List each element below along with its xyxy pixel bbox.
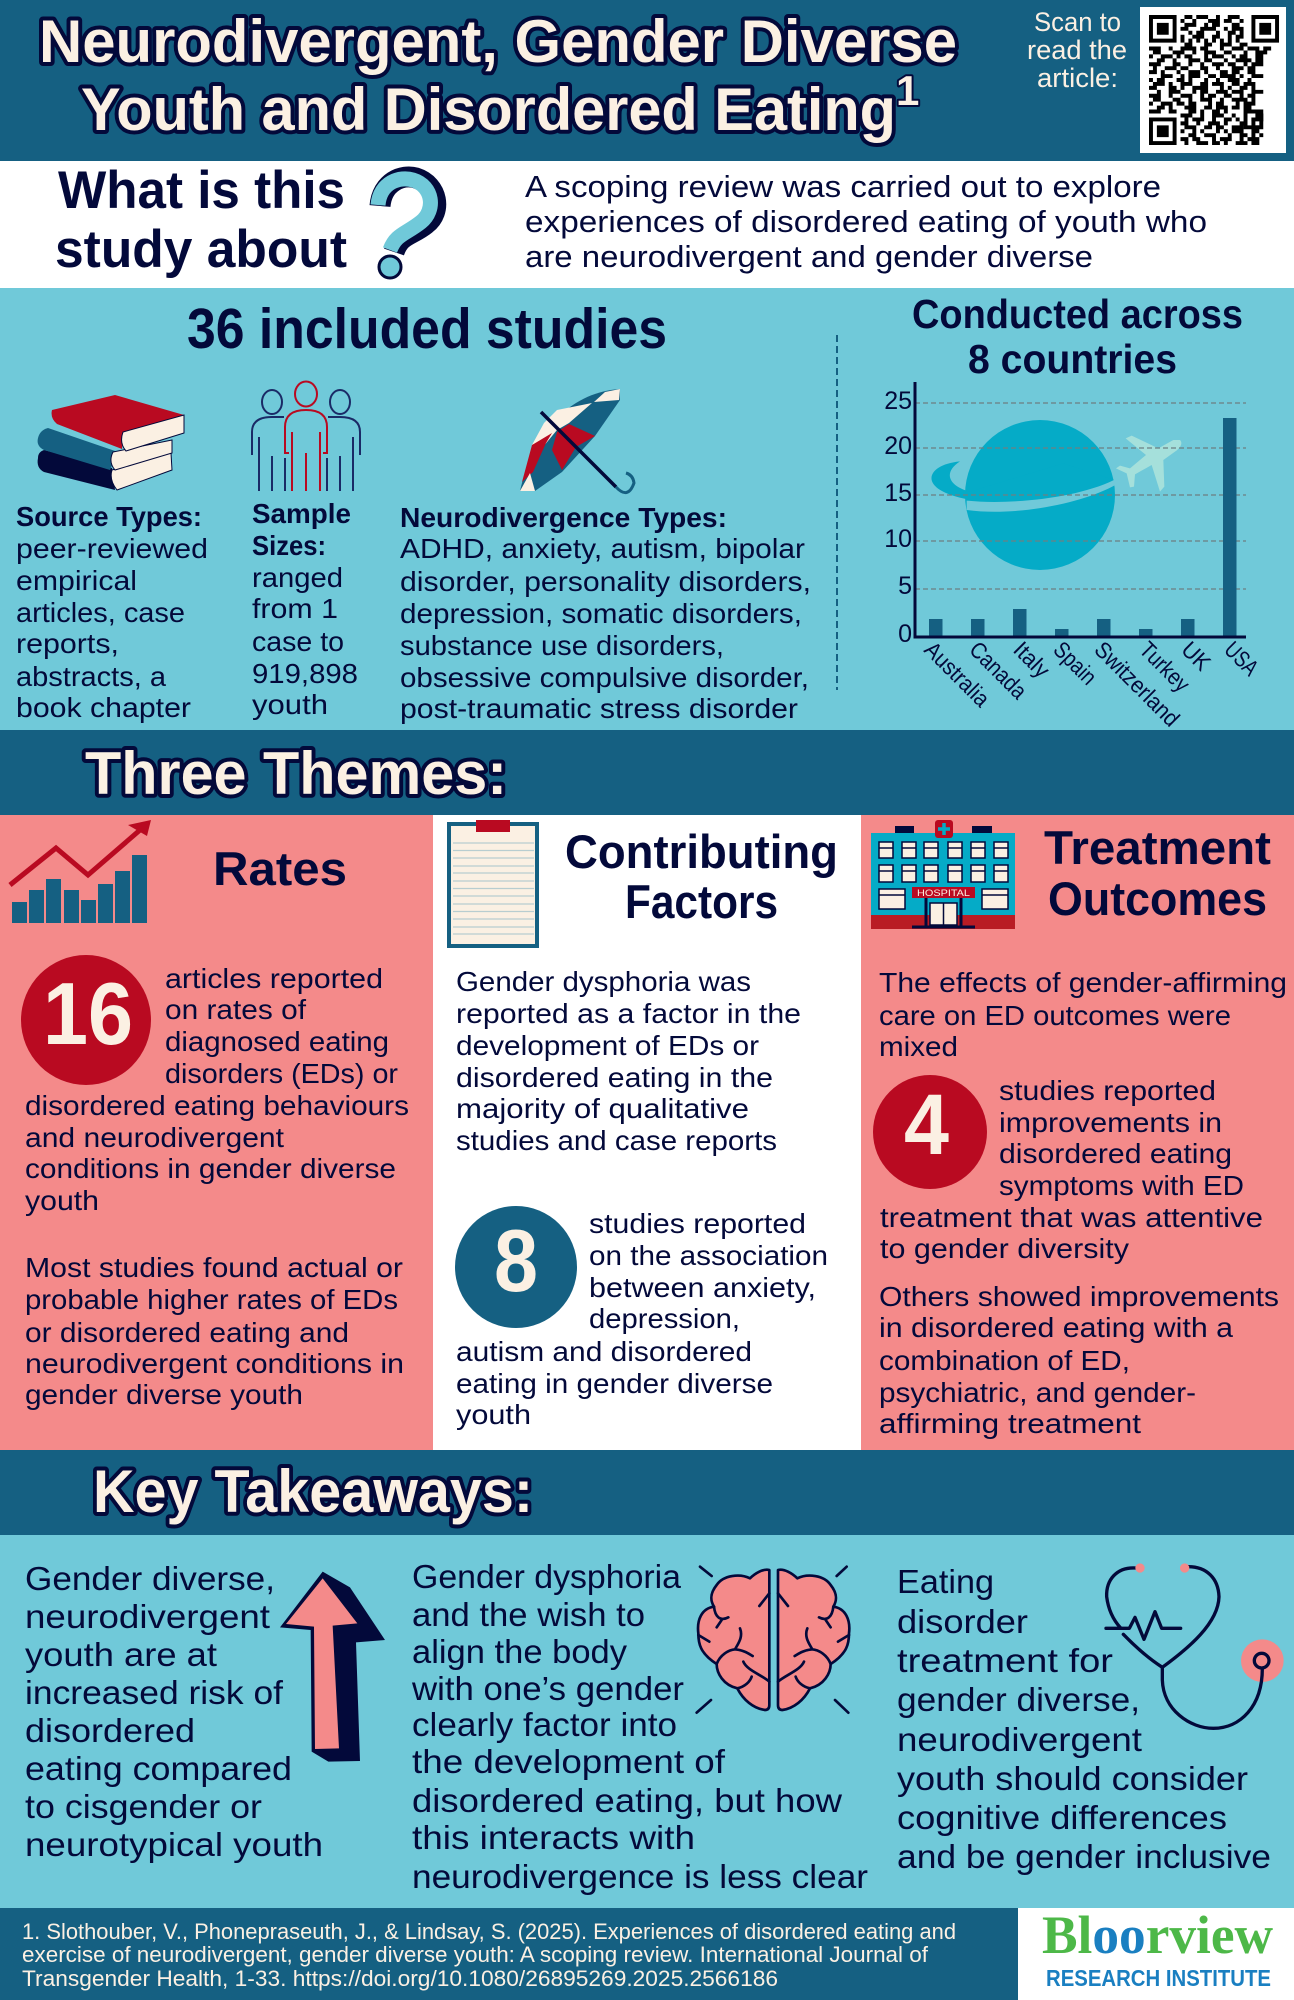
text: source types: articles, case	[16, 597, 185, 628]
text: higher rates finding: gender diverse youth	[25, 1379, 303, 1410]
text: gender dysphoria: disordered eating in the	[456, 1062, 773, 1093]
takeaway: gender dysphoria: with one’s gender	[411, 1670, 684, 1707]
icon: up arrow	[280, 1572, 385, 1762]
text: association studies	[456, 1208, 828, 1430]
footer: citation	[0, 1908, 1018, 2000]
heading: what is this study about: What is this	[58, 161, 345, 220]
text: higher rates finding: or disordered eating and	[25, 1317, 349, 1348]
text: association studies: on the association	[589, 1240, 828, 1271]
text: association studies: depression,	[589, 1303, 740, 1334]
text: combined treatment: combination of ED,	[879, 1345, 1130, 1376]
text: combined treatment	[879, 1281, 1279, 1439]
text: rates of eating disorders: and neurodivergent	[25, 1122, 284, 1153]
title: Neurodivergent, Gender Diverse	[39, 8, 957, 75]
text: mixed effects: mixed	[879, 1031, 958, 1062]
takeaway: increased risk: Gender diverse,	[25, 1560, 275, 1597]
heading band: key takeaways: Key Takeaways:	[93, 1458, 533, 1525]
bar chart: studies per country: Turkey	[1134, 636, 1196, 697]
bar chart: studies per country: Spain	[1048, 636, 1102, 690]
heading band: key takeaways	[0, 1450, 1294, 1535]
text: improvement studies: to gender diversity	[880, 1233, 1129, 1264]
QR code	[1140, 7, 1286, 153]
text: rates of eating disorders: disorders (EDs) or	[165, 1058, 398, 1089]
text: neurodivergence types	[400, 502, 811, 724]
text: association studies: studies reported	[589, 1208, 806, 1239]
stat circle: 8	[455, 1206, 577, 1328]
text: sample sizes: ranged	[252, 562, 343, 593]
text: combined treatment: affirming treatment	[879, 1408, 1141, 1439]
takeaway: increased risk: neurotypical youth	[25, 1826, 323, 1863]
text: neurodivergence types: depression, somatic disorders,	[400, 598, 802, 629]
takeaway: inclusive treatment: cognitive differences	[897, 1799, 1227, 1836]
stat circle: 4: 4	[904, 1077, 949, 1173]
text: rates of eating disorders: conditions in gender diverse	[25, 1153, 396, 1184]
icon: globe with plane	[931, 420, 1181, 570]
panel: what is this study about	[0, 161, 1294, 288]
heading: conducted across 8 countries: 8 countries	[968, 336, 1177, 382]
takeaway: inclusive treatment: gender diverse,	[897, 1681, 1140, 1718]
text: association studies: between anxiety,	[589, 1272, 816, 1303]
text: neurodivergence types: Neurodivergence Types:	[400, 502, 727, 533]
stat circle: 16: 16	[43, 964, 133, 1063]
takeaway: inclusive treatment: and be gender inclusive	[897, 1838, 1271, 1875]
bar chart: studies per country: 0	[898, 620, 912, 648]
text: source types: peer-reviewed	[16, 533, 208, 564]
icon: hospital: HOSPITAL	[917, 888, 970, 898]
text: rates of eating disorders: diagnosed eating	[165, 1026, 389, 1057]
icon: people	[252, 382, 360, 491]
study description	[525, 169, 1207, 274]
icon: hospital	[871, 820, 1015, 929]
takeaway: increased risk: eating compared	[25, 1750, 292, 1787]
text: rates of eating disorders: disordered eating behaviours	[25, 1090, 409, 1121]
text: neurodivergence types: disorder, personality disorders,	[400, 566, 811, 597]
takeaway: gender dysphoria	[411, 1558, 868, 1895]
stat circle: 8: 8	[494, 1211, 538, 1310]
heading: conducted across 8 countries: Conducted across	[912, 291, 1243, 337]
text: improvement studies: symptoms with ED	[999, 1170, 1244, 1201]
text: higher rates finding: probable higher rates of EDs	[25, 1284, 398, 1315]
takeaway: inclusive treatment: disorder	[897, 1603, 1028, 1640]
text: gender dysphoria: Gender dysphoria was	[456, 966, 751, 997]
panel: included studies	[0, 288, 1294, 732]
stat circle: 16	[21, 955, 151, 1085]
scan prompt: read the	[1027, 35, 1127, 65]
text: sample sizes: Sample	[252, 498, 351, 529]
takeaway: gender dysphoria: the development of	[412, 1743, 726, 1780]
takeaway: inclusive treatment	[897, 1563, 1271, 1875]
text: combined treatment: in disordered eating with a	[879, 1312, 1233, 1343]
footer: citation: 1. Slothouber, V., Phonepraseuth, J., & Lindsay, S. (2025). Experiences of disordered eating and	[22, 1919, 956, 1944]
takeaway: increased risk: to cisgender or	[25, 1788, 262, 1825]
text: gender dysphoria: development of EDs or	[456, 1030, 759, 1061]
heading band: three themes: Three Themes:	[85, 740, 507, 807]
text: mixed effects: The effects of gender-affirming	[879, 967, 1287, 998]
logo: Bloorview Research Institute: RESEARCH INSTITUTE	[1046, 1965, 1271, 1991]
heading: conducted across 8 countries	[912, 291, 1243, 382]
bar chart: studies per country: 20	[884, 432, 912, 460]
takeaway: inclusive treatment: treatment for	[897, 1642, 1113, 1679]
bar chart: studies per country: 25	[884, 387, 912, 415]
logo: Bloorview Research Institute	[1018, 1905, 1294, 2000]
text: gender dysphoria	[456, 966, 801, 1156]
text: sample sizes	[252, 498, 358, 720]
heading: treatment outcomes	[1044, 821, 1271, 925]
bar chart: studies per country: 5	[898, 572, 912, 600]
icon: question mark	[378, 177, 436, 278]
takeaway: inclusive treatment: Eating	[897, 1563, 994, 1600]
icon: umbrella	[520, 389, 634, 493]
icon: rising bar chart	[10, 820, 151, 923]
takeaway: increased risk	[25, 1560, 323, 1863]
text: rates of eating disorders: on rates of	[165, 994, 306, 1025]
footer: citation: Transgender Health, 1-33. https://doi.org/10.1080/26895269.2025.2566186	[22, 1966, 778, 1991]
text: mixed effects: care on ED outcomes were	[879, 1000, 1231, 1031]
text: sample sizes: from 1	[252, 593, 338, 624]
text: neurodivergence types: ADHD, anxiety, autism, bipolar	[400, 533, 805, 564]
bar chart: studies per country: USA	[1219, 636, 1264, 681]
bar chart: studies per country: Italy	[1008, 636, 1055, 683]
text: improvement studies: studies reported	[999, 1075, 1216, 1106]
heading: contributing factors	[565, 825, 838, 928]
text: gender dysphoria: majority of qualitative	[456, 1093, 749, 1124]
logo: Bloorview Research Institute: Bloorview	[1042, 1905, 1273, 1965]
text: source types: book chapter	[16, 692, 191, 723]
study description: are neurodivergent and gender diverse	[525, 239, 1093, 274]
text: source types: Source Types:	[16, 501, 202, 532]
scan prompt	[1027, 7, 1127, 93]
text: rates of eating disorders	[25, 963, 409, 1216]
takeaway: inclusive treatment: youth should consider	[897, 1760, 1248, 1797]
takeaway: gender dysphoria: and the wish to	[412, 1596, 645, 1633]
heading: contributing factors: Factors	[625, 875, 778, 928]
heading: 36 included studies: 36 included studies	[187, 297, 667, 361]
text: association studies: eating in gender diverse	[456, 1368, 773, 1399]
panel: key takeaways	[0, 1535, 1294, 1908]
bar chart: studies per country: Canada	[964, 636, 1032, 704]
bar chart: studies per country	[884, 382, 1264, 732]
text: improvement studies: improvements in	[999, 1107, 1222, 1138]
text: sample sizes: youth	[252, 689, 328, 720]
heading: treatment outcomes: Treatment	[1044, 821, 1271, 874]
text: gender dysphoria: studies and case reports	[456, 1125, 777, 1156]
text: combined treatment: Others showed improvements	[879, 1281, 1279, 1312]
takeaway: increased risk: youth are at	[25, 1636, 217, 1673]
text: higher rates finding: neurodivergent conditions in	[25, 1348, 404, 1379]
bar chart: studies per country: UK	[1176, 636, 1216, 676]
stat circle: 4	[873, 1075, 987, 1189]
scan prompt: Scan to	[1034, 7, 1121, 37]
takeaway: gender dysphoria: neurodivergence is less clear	[412, 1858, 868, 1895]
text: improvement studies: disordered eating	[999, 1138, 1232, 1169]
text: sample sizes: 919,898	[252, 658, 358, 689]
footer: citation: exercise of neurodivergent, gender diverse youth: A scoping review. International Journal of	[22, 1942, 929, 1967]
takeaway: gender dysphoria: this interacts with	[412, 1819, 695, 1856]
heading: what is this study about: study about	[55, 220, 347, 279]
text: neurodivergence types: post-traumatic stress disorder	[400, 693, 798, 724]
panel: rates	[0, 815, 433, 1450]
study description: A scoping review was carried out to explore	[525, 169, 1161, 204]
title	[39, 8, 957, 143]
text: combined treatment: psychiatric, and gender-	[879, 1377, 1196, 1408]
bar chart: studies per country: 10	[884, 525, 912, 553]
text: source types: reports,	[16, 628, 119, 659]
scan prompt: article:	[1037, 63, 1118, 93]
text: association studies: youth	[456, 1399, 531, 1430]
takeaway: inclusive treatment: neurodivergent	[897, 1721, 1142, 1758]
text: gender dysphoria: reported as a factor in the	[456, 998, 801, 1029]
title: 1	[896, 67, 919, 114]
text: higher rates finding: Most studies found actual or	[25, 1252, 403, 1283]
takeaway: gender dysphoria: Gender dysphoria	[412, 1558, 682, 1595]
text: rates of eating disorders: articles reported	[165, 963, 383, 994]
takeaway: gender dysphoria: align the body	[412, 1633, 628, 1670]
takeaway: increased risk: neurodivergent	[25, 1598, 270, 1635]
header band	[0, 0, 1294, 161]
text: source types: empirical	[16, 565, 137, 596]
study description: experiences of disordered eating of youth who	[525, 204, 1207, 239]
icon: books	[38, 395, 184, 490]
heading band: three themes	[0, 730, 1294, 815]
text: rates of eating disorders: youth	[25, 1185, 99, 1216]
takeaway: gender dysphoria: clearly factor into	[412, 1706, 677, 1743]
text: sample sizes: Sizes:	[252, 530, 326, 561]
bar chart: studies per country: 15	[884, 479, 912, 507]
text: association studies: autism and disordered	[456, 1336, 752, 1367]
text: higher rates finding	[25, 1252, 404, 1410]
takeaway: gender dysphoria: disordered eating, but how	[412, 1782, 842, 1819]
icon: clipboard	[449, 820, 537, 946]
icon: brain	[697, 1567, 849, 1713]
takeaway: increased risk: increased risk of	[25, 1674, 284, 1711]
text: neurodivergence types: obsessive compulsive disorder,	[400, 662, 809, 693]
takeaway: increased risk: disordered	[25, 1712, 195, 1749]
panel: contributing factors	[433, 815, 861, 1450]
text: sample sizes: case to	[252, 626, 344, 657]
bar chart: studies per country: Australia	[919, 636, 995, 712]
heading: treatment outcomes: Outcomes	[1048, 872, 1267, 925]
text: source types: abstracts, a	[16, 661, 166, 692]
panel: treatment outcomes	[861, 815, 1294, 1450]
text: improvement studies: treatment that was attentive	[880, 1202, 1263, 1233]
text: source types	[16, 501, 208, 723]
heading: what is this study about	[55, 161, 347, 279]
bar chart: studies per country: Switzerland	[1089, 636, 1185, 732]
heading: rates: Rates	[213, 842, 347, 895]
text: mixed effects	[879, 967, 1287, 1062]
title: Youth and Disordered Eating	[81, 76, 896, 143]
heading: contributing factors: Contributing	[565, 825, 838, 878]
icon: stethoscope	[1106, 1563, 1284, 1728]
text: neurodivergence types: substance use disorders,	[400, 630, 724, 661]
text: improvement studies	[880, 1075, 1263, 1264]
